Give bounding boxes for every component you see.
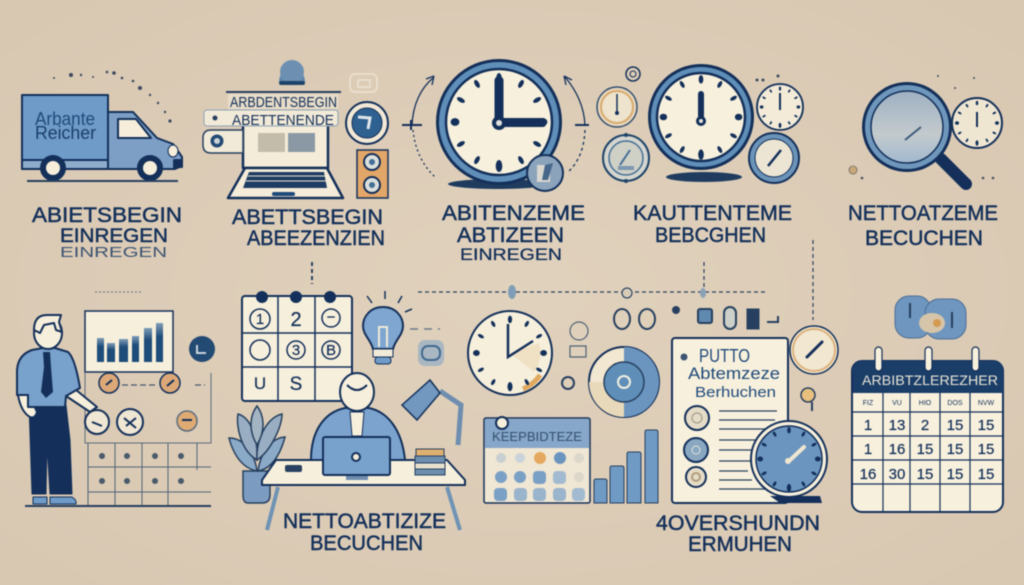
panel: clock cluster — [597, 64, 803, 183]
panel: big calendar — [852, 296, 1003, 512]
panel: big clock — [402, 59, 589, 191]
icon: gauge clock — [751, 421, 827, 497]
calendar body: 15 — [978, 466, 994, 483]
arrows around clock — [402, 76, 589, 177]
label: Nettoatzeme becuchen: BECUCHEN — [865, 227, 983, 250]
ground line — [27, 180, 178, 182]
calendar body: 15 — [947, 466, 963, 483]
icon: small dots — [756, 74, 780, 82]
grid dots — [99, 453, 184, 484]
process panel — [85, 372, 211, 443]
wall calendar: B — [326, 342, 336, 359]
dashed connectors — [95, 240, 813, 320]
icon: donut gauge — [589, 347, 659, 417]
label: Kauttenteme bebcghen: KAUTTENTEME — [633, 202, 792, 225]
calendar body — [852, 347, 1003, 512]
label: Abitenzeme abtizeen einregen: EINREGEN — [460, 245, 562, 264]
icon: small calendar: KEEPBIDTEZE — [492, 429, 582, 444]
calendar body: HIO — [919, 400, 932, 407]
bar chart — [594, 430, 658, 503]
chart — [85, 311, 173, 372]
person — [17, 315, 97, 504]
panel: laptop — [203, 60, 388, 198]
icon: compass dial — [749, 133, 799, 183]
label: Abietsbegin einregen: ABIETSBEGIN — [32, 204, 182, 227]
label: Abettsbegin abeezenzien: ABEEZENZIEN — [247, 227, 385, 250]
icon: faint glyphs — [562, 322, 588, 389]
calendar body: 30 — [889, 466, 905, 483]
icon: wall clock — [468, 311, 552, 395]
panel: truck — [22, 71, 182, 182]
icon: navy badge — [189, 336, 215, 362]
icon: speckle dots — [861, 75, 994, 179]
icon: small orange blob — [849, 166, 857, 174]
ground line — [25, 505, 211, 507]
field: small pill — [203, 130, 243, 153]
panel: person with chart — [17, 311, 215, 507]
icon: clock badge — [346, 102, 388, 144]
clock shadow — [448, 179, 548, 189]
calendar body: 1 — [864, 441, 872, 458]
label: Abettsbegin abeezenzien — [232, 206, 385, 250]
panel: time tools — [468, 306, 778, 503]
calendar body: 16 — [889, 441, 905, 458]
label: Abitenzeme abtizeen einregen — [442, 202, 585, 264]
connector nodes — [508, 285, 706, 299]
icon: central clock — [648, 64, 754, 170]
calendar body: 15 — [978, 441, 994, 458]
calendar body: 15 — [947, 441, 963, 458]
label: 40vershundn ermuhen: ERMUHEN — [688, 533, 792, 556]
label: Abietsbegin einregen: EINREGEN — [60, 226, 168, 247]
calendar body: VU — [892, 400, 902, 407]
gauge shadow — [770, 496, 822, 503]
icon: light bulb — [363, 291, 412, 364]
icon: blob cluster — [895, 296, 966, 339]
icon: plant — [229, 406, 285, 503]
wall calendar: U — [254, 374, 266, 393]
label: Nettoatzeme becuchen — [848, 202, 998, 250]
label: Abietsbegin einregen: EINREGEN — [60, 244, 167, 261]
wall calendar: 3 — [292, 342, 300, 359]
icon: gear gauge — [603, 133, 649, 183]
label: Kauttenteme bebcghen — [633, 202, 792, 247]
calendar body: NVW — [978, 400, 995, 407]
document: PUTTO — [699, 346, 750, 366]
icon: small ring — [626, 67, 640, 81]
calendar body: 13 — [889, 417, 905, 434]
label: Kauttenteme bebcghen: BEBCGHEN — [655, 224, 766, 247]
calendar body: 15 — [917, 441, 933, 458]
label: Nettoabtizize becuchen — [283, 510, 446, 555]
icon: small rounded icon — [418, 340, 444, 366]
icon: truck — [22, 95, 182, 180]
icon: badge on clock — [527, 155, 563, 191]
label: Nettoatzeme becuchen: NETTOATZEME — [848, 202, 998, 225]
header line — [226, 91, 341, 93]
label: Abitenzeme abtizeen einregen: ABTIZEEN — [457, 224, 564, 247]
grid table — [88, 443, 211, 506]
label: Abietsbegin einregen — [32, 204, 182, 261]
wall calendar: S — [290, 374, 302, 395]
process icons — [85, 373, 197, 435]
icon: small orange clock — [597, 87, 637, 127]
wall calendar: − — [327, 309, 336, 326]
dash — [410, 328, 440, 330]
panel: desk scene — [229, 291, 465, 530]
icon: books — [415, 449, 445, 475]
icon: small calendar — [484, 417, 590, 503]
icon: faint frame — [350, 74, 377, 92]
dashed process link — [122, 384, 205, 386]
icon: small dial — [790, 326, 838, 374]
panel: document with gauge — [672, 326, 838, 503]
icon: desk lamp — [402, 380, 461, 445]
calendar body: 1 — [864, 417, 872, 434]
icon: row of small icons — [614, 306, 778, 329]
truck text — [35, 109, 96, 143]
label: 40vershundn ermuhen — [656, 512, 820, 556]
wall calendar: 2 — [290, 309, 302, 331]
calendar body: 15 — [947, 417, 963, 434]
icon: orange speaker — [357, 150, 388, 198]
field: Abeitsende — [204, 110, 338, 129]
truck text: Reicher — [35, 123, 96, 143]
document — [672, 338, 788, 503]
icon: keyhole — [801, 388, 815, 411]
calendar body: FIZ — [863, 400, 874, 407]
icon: desk — [262, 460, 465, 530]
label: Nettoabtizize becuchen: BECUCHEN — [310, 532, 423, 555]
truck text: Arbante — [35, 109, 95, 129]
label: 40vershundn ermuhen: 4OVERSHUNDN — [656, 512, 820, 535]
icon: clock behind magnifier — [952, 98, 1002, 148]
icon: dotted arc above truck — [53, 71, 172, 123]
panel: magnifier — [849, 75, 1002, 184]
label: Abitenzeme abtizeen einregen: ABITENZEME — [442, 202, 585, 225]
calendar body: 16 — [860, 466, 876, 483]
document: Abtemzeze — [688, 364, 780, 383]
icon: clock — [436, 59, 562, 185]
document: Berhuchen — [695, 384, 776, 401]
calendar body: 15 — [917, 466, 933, 483]
icon: person at desk — [311, 373, 405, 466]
field: Abeitsende: ABETTENENDE — [232, 112, 334, 129]
icon: laptop — [228, 123, 343, 198]
icon: knob — [279, 60, 305, 85]
calendar body: DOS — [947, 400, 963, 407]
calendar body: ARBIBTZLEREZHER — [862, 372, 998, 388]
icon: laptop on desk — [323, 437, 390, 480]
label: Abettsbegin abeezenzien: ABETTSBEGIN — [232, 206, 383, 229]
wall calendar — [242, 291, 352, 401]
label: Nettoabtizize becuchen: NETTOABTIZIZE — [283, 510, 446, 533]
wall calendar: 1 — [256, 311, 264, 328]
field: Arbeitsbeginn: ARBDENTSBEGIN — [230, 94, 337, 111]
calendar body: 15 — [978, 417, 994, 434]
calendar body: 2 — [921, 417, 929, 434]
icon: magnifier — [862, 82, 966, 184]
clock shadow — [666, 172, 742, 182]
icon: small clock right — [757, 84, 803, 130]
